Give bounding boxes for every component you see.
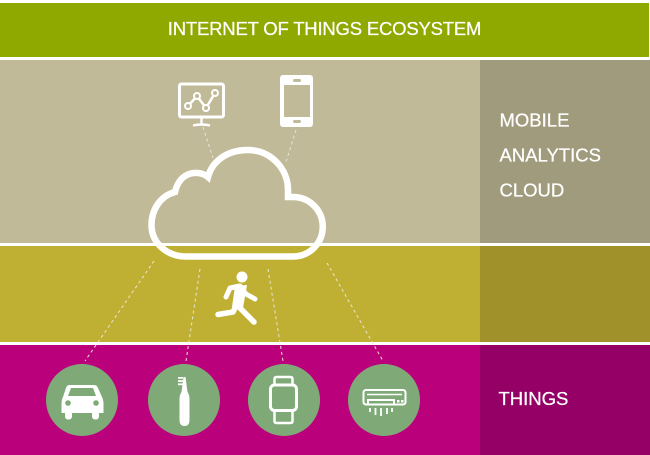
icon: smartphone — [280, 75, 313, 127]
title: INTERNET OF THINGS ECOSYSTEM — [168, 18, 481, 39]
band: header — [0, 3, 649, 57]
band: things layer side panel — [480, 345, 650, 455]
icon: cloud — [152, 150, 323, 256]
thing: electric toothbrush — [148, 364, 220, 436]
thing: smartwatch — [248, 364, 320, 436]
dotted connectors — [85, 127, 383, 361]
band: people layer — [0, 246, 480, 342]
label: mobile analytics cloud — [500, 110, 601, 200]
label: mobile analytics cloud: MOBILE — [500, 110, 569, 130]
label: things: THINGS — [498, 388, 568, 409]
icon: analytics monitor — [180, 84, 224, 126]
thing: air conditioner — [348, 364, 420, 436]
thing: car — [46, 364, 118, 436]
label: mobile analytics cloud: CLOUD — [500, 180, 564, 200]
band: people layer side panel — [480, 246, 650, 342]
band: cloud layer — [0, 60, 480, 243]
band: cloud layer side panel — [480, 60, 650, 243]
icon: running person — [218, 272, 255, 322]
label: mobile analytics cloud: ANALYTICS — [500, 144, 601, 166]
band: things layer — [0, 345, 480, 455]
